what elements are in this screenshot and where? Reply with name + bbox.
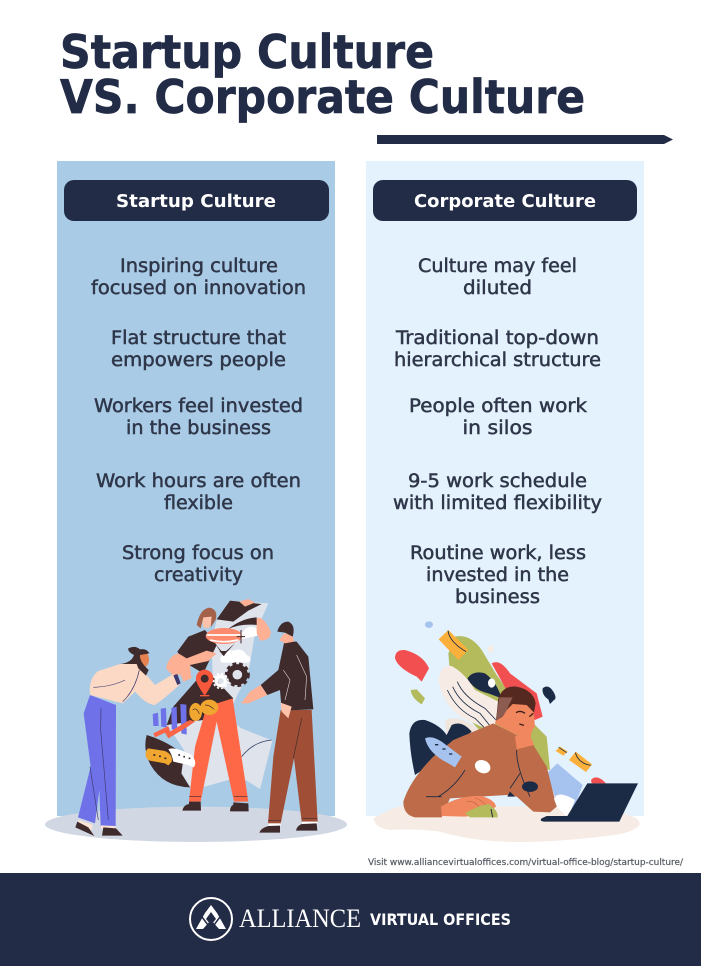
heading: corporate culture bbox=[373, 180, 637, 221]
illustration: team around a map bbox=[45, 599, 347, 842]
text: schedule: with limited flexibility bbox=[393, 493, 602, 514]
desk bbox=[373, 805, 640, 842]
background shapes bbox=[395, 621, 606, 810]
title underline arrow bbox=[377, 135, 673, 144]
text: workers invested: Workers feel invested bbox=[94, 396, 303, 417]
map icons: airship, gears, pin, coins, bars, speech bubbles bbox=[146, 628, 248, 767]
text: workers invested bbox=[94, 396, 303, 439]
text: hierarchy: hierarchical structure bbox=[394, 350, 601, 371]
envelope icons bbox=[439, 630, 592, 772]
text: diluted culture: Culture may feel bbox=[418, 256, 577, 277]
logo wordmark: ALLIANCE bbox=[239, 904, 361, 933]
text: diluted culture bbox=[418, 256, 577, 299]
logo mark bbox=[190, 898, 232, 940]
text: workers invested: in the business bbox=[126, 418, 271, 439]
logo wordmark bbox=[239, 904, 511, 933]
text: routine work: invested in the bbox=[426, 565, 569, 586]
footer band bbox=[0, 873, 701, 966]
title: VS. Corporate Culture bbox=[60, 70, 585, 124]
source link: Visit www.alliancevirtualoffices.com/virtual-office-blog/startup-culture/ bbox=[368, 858, 683, 868]
text: diluted culture: diluted bbox=[463, 278, 532, 299]
title bbox=[60, 25, 585, 124]
text: hierarchy bbox=[394, 328, 601, 371]
map sheet bbox=[145, 601, 272, 789]
person: woman in orange trousers bbox=[166, 599, 271, 811]
laptop bbox=[541, 783, 638, 822]
worker in brown sweater bbox=[403, 686, 575, 817]
text: creativity: Strong focus on bbox=[122, 543, 274, 564]
person: man in black jacket and brown trousers bbox=[241, 622, 318, 833]
text: flat structure: Flat structure that bbox=[111, 328, 286, 349]
text: flexible hours: flexible bbox=[164, 493, 233, 514]
text: flat structure bbox=[111, 328, 286, 371]
person: woman in blue trousers bbox=[75, 647, 192, 836]
heading: corporate culture: Corporate Culture bbox=[414, 191, 596, 212]
text: hierarchy: Traditional top-down bbox=[395, 328, 599, 349]
ground ellipse bbox=[45, 807, 347, 842]
text: routine work bbox=[410, 543, 586, 608]
text: flat structure: empowers people bbox=[111, 350, 286, 371]
text: creativity bbox=[122, 543, 274, 586]
text: silos: in silos bbox=[462, 418, 532, 439]
heading: startup culture: Startup Culture bbox=[116, 191, 276, 212]
text: inspiring culture: Inspiring culture bbox=[120, 256, 278, 277]
text: schedule bbox=[393, 471, 602, 514]
text: creativity: creativity bbox=[154, 565, 243, 586]
text: routine work: business bbox=[455, 587, 540, 608]
heading: startup culture bbox=[64, 180, 329, 221]
text: flexible hours: Work hours are often bbox=[96, 471, 301, 492]
panel: corporate culture bbox=[366, 161, 644, 816]
text: flexible hours bbox=[96, 471, 301, 514]
text: inspiring culture bbox=[91, 256, 306, 299]
logo wordmark: VIRTUAL OFFICES bbox=[370, 910, 511, 929]
text: silos bbox=[409, 396, 587, 439]
text: silos: People often work bbox=[409, 396, 587, 417]
panel: startup culture bbox=[57, 161, 335, 816]
text: schedule: 9-5 work schedule bbox=[408, 471, 587, 492]
title: Startup Culture bbox=[60, 25, 434, 79]
text: inspiring culture: focused on innovation bbox=[91, 278, 306, 299]
illustration: bored office worker bbox=[373, 621, 640, 842]
text: routine work: Routine work, less bbox=[410, 543, 586, 564]
